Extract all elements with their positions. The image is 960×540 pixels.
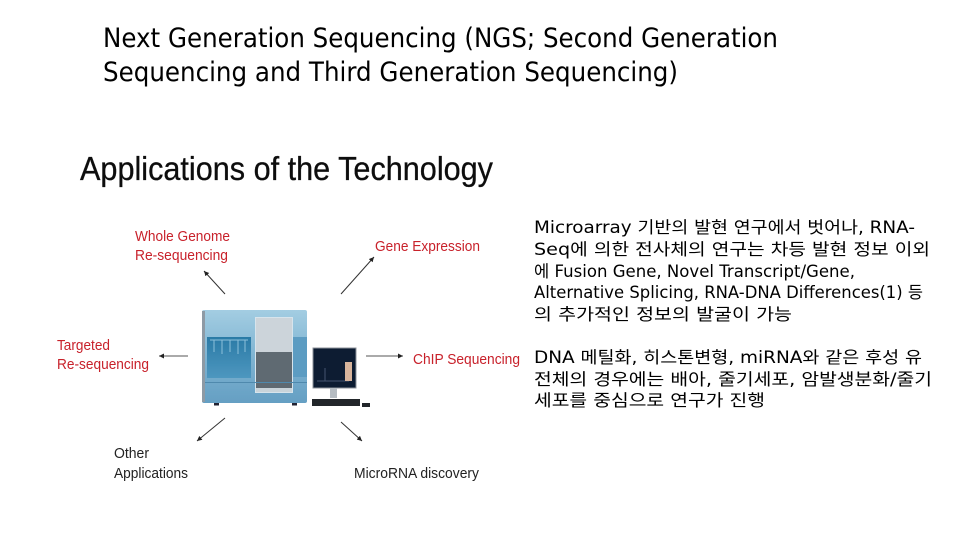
icon: monitor and keyboard — [312, 348, 370, 407]
label: gene expression: Gene Expression — [375, 239, 480, 255]
text block: epigenome description — [534, 348, 932, 410]
text block: epigenome description: 세포를 중심으로 연구가 진행 — [534, 391, 765, 410]
label: targeted re-sequencing: Targeted — [57, 338, 110, 354]
title: Sequencing and Third Generation Sequencing) — [103, 57, 678, 88]
text block: rna-seq description: Seq에 의한 전사체의 연구는 차등 발현 정보 이외 — [534, 240, 930, 259]
label: other applications: Other — [114, 446, 149, 462]
title — [103, 23, 778, 88]
arrow: to targeted — [159, 355, 188, 357]
panel: applications diagram — [57, 151, 520, 482]
text block: rna-seq description — [534, 218, 930, 324]
label: targeted re-sequencing — [57, 338, 149, 373]
text block: epigenome description: 전체의 경우에는 배아, 줄기세포, 암발생분화/줄기 — [534, 370, 932, 389]
heading: applications of the technology: Applications of the Technology — [80, 151, 493, 188]
label: microrna discovery: MicroRNA discovery — [354, 466, 480, 482]
label: other applications — [114, 446, 188, 482]
label: targeted re-sequencing: Re-sequencing — [57, 357, 149, 373]
arrow: to chip — [366, 355, 403, 357]
text block: rna-seq description: Microarray 기반의 발현 연구에서 벗어나, RNA- — [534, 218, 915, 237]
label: whole genome re-sequencing — [135, 229, 230, 264]
label: whole genome re-sequencing: Re-sequencing — [135, 248, 228, 264]
label: whole genome re-sequencing: Whole Genome — [135, 229, 230, 245]
title: Next Generation Sequencing (NGS; Second Generation — [103, 23, 778, 54]
text block: epigenome description: DNA 메틸화, 히스톤변형, miRNA와 같은 후성 유 — [534, 348, 922, 367]
label: other applications: Applications — [114, 466, 188, 482]
arrow: to microrna — [341, 422, 362, 441]
text block: rna-seq description: 의 추가적인 정보의 발굴이 가능 — [534, 305, 792, 324]
arrow: to gene expression — [341, 257, 374, 294]
icon: sequencer machine — [202, 310, 307, 406]
arrow: to whole genome — [204, 271, 225, 294]
text block: rna-seq description: Alternative Splicing, RNA-DNA Differences(1) 등 — [534, 283, 923, 302]
text block: rna-seq description: 에 Fusion Gene, Novel Transcript/Gene, — [534, 262, 855, 281]
arrow: to other — [197, 418, 225, 441]
label: chip sequencing: ChIP Sequencing — [413, 352, 520, 368]
